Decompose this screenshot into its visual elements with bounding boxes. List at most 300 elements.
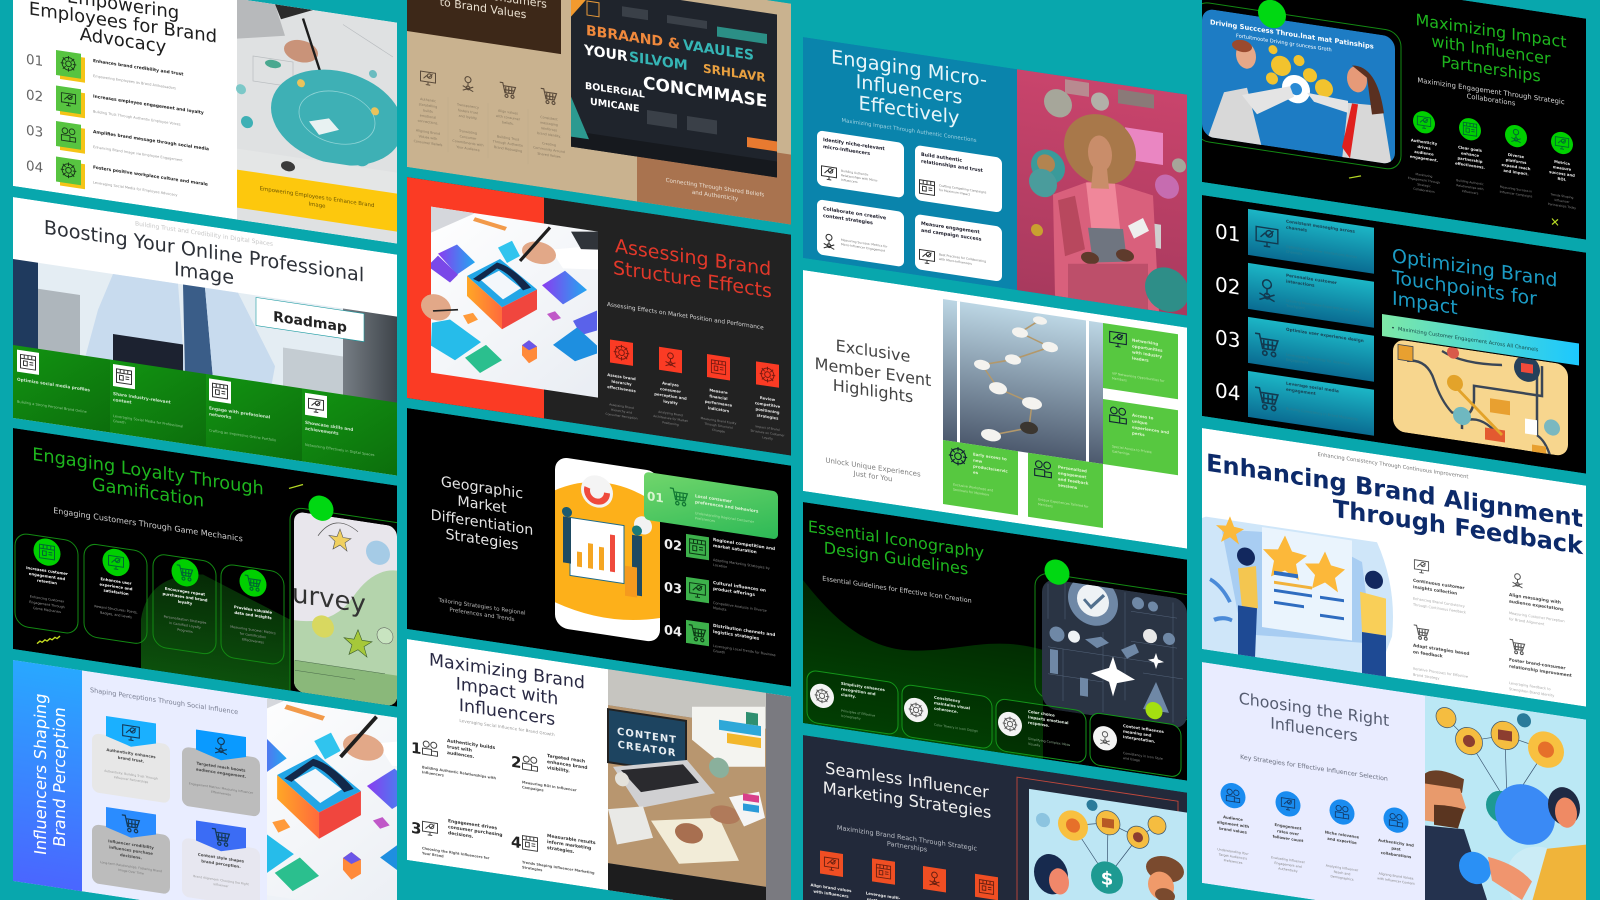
- column 1: [414, 70, 443, 147]
- list item 3: product offerings: [713, 586, 755, 598]
- card 2: Targeted reach boosts: [197, 761, 246, 773]
- item 1: 1: [411, 739, 421, 758]
- row 3: 03: [1215, 325, 1240, 353]
- item 2: [1271, 789, 1306, 875]
- feature D: engagement: [1058, 470, 1086, 480]
- subtitle: Key Strategies for Effective Influencer Selection: [1240, 754, 1388, 783]
- list item 2: Adapting Marketing Strategies by: [713, 558, 770, 570]
- card 1: Engagement Through: [29, 600, 65, 609]
- card 4: Context influences: [1123, 723, 1165, 734]
- item 2: Evaluating Influencer: [1271, 855, 1306, 865]
- card 4: Content style shapes: [198, 852, 245, 864]
- item 4: relationship improvement: [1509, 664, 1572, 679]
- list row 2: 02: [26, 87, 43, 106]
- card 3: Simplifying Complex Ideas: [1028, 737, 1071, 747]
- photo: woman in pink: [1017, 69, 1189, 316]
- subtitle: Maximizing Impact Through Authentic Connections: [842, 118, 977, 144]
- item 4: Trends Shaping Influencer Marketing: [522, 860, 595, 875]
- row 4: Building Consistency in Brand Messaging: [1286, 407, 1358, 421]
- item 1: Assess brand: [607, 372, 636, 381]
- list item 1: Preferences: [695, 516, 715, 523]
- column 4: reinforces: [541, 126, 557, 133]
- card 1: Principles of Effective: [841, 709, 875, 718]
- card 2: Growth: [113, 419, 126, 425]
- item 4: Strengthen Brand Identity: [1509, 687, 1554, 698]
- item 2: Architecture for Market: [653, 414, 689, 423]
- item 3: Through Structural: [703, 421, 733, 430]
- card 1: recognition and: [841, 686, 876, 696]
- list row 1: [26, 50, 184, 90]
- list row 4: [26, 156, 208, 197]
- card 3: Micro-Influencer Engagement: [841, 242, 886, 253]
- feature C: Seminars for Members: [953, 488, 989, 497]
- card 1: brand trust.: [118, 755, 145, 764]
- row 3: Engagement: [1286, 358, 1309, 365]
- title: Optimizing Brand: [1392, 244, 1557, 292]
- card 4: for Gamification: [240, 632, 266, 639]
- item 4: [1548, 130, 1576, 210]
- item 3: expand reach: [1502, 162, 1531, 171]
- card 4: meaning and: [1123, 729, 1152, 738]
- list row 3: 03: [26, 123, 43, 141]
- feature C: products/servic: [973, 464, 1008, 474]
- title: Design Guidelines: [824, 538, 968, 579]
- column 4: Community Around: [533, 145, 565, 154]
- card 3: decisions.: [120, 852, 142, 860]
- feature C: [943, 440, 1018, 515]
- item 4: [1509, 639, 1572, 700]
- item 2: Campaigns: [522, 785, 544, 792]
- column 3: Through Authentic: [492, 139, 523, 148]
- row 4: Leverage social media: [1286, 381, 1339, 394]
- card 4: with Micro-Influencers: [939, 257, 972, 266]
- column 4: messaging: [540, 120, 558, 127]
- card 4: and Usage: [1123, 756, 1140, 763]
- card 3: Measuring Success: Metrics for: [841, 238, 888, 249]
- item 1: Target Audience's: [1218, 852, 1247, 861]
- title: [831, 45, 987, 134]
- list item 1: preferences and behaviors: [695, 499, 759, 514]
- title: Touchpoints for: [1391, 265, 1537, 310]
- brown caption box: and Authenticity: [692, 190, 739, 203]
- item 2: Analyzing Brand: [658, 410, 683, 417]
- card 3: Engage with professional: [209, 405, 271, 421]
- card 3: [206, 374, 302, 461]
- feedback illustration: [1202, 512, 1393, 679]
- list row 4: Leveraging Social Media for Employee Advocacy: [93, 181, 177, 197]
- item 2: [1509, 572, 1565, 629]
- card 4: Best Practices for Collaborating: [939, 252, 986, 263]
- card 3: Image Over Time: [118, 868, 144, 876]
- item 4: Trends Shaping: [1550, 192, 1573, 200]
- list row 4: Fosters positive workplace culture and morale: [93, 165, 208, 188]
- column 4: Consistent: [540, 115, 558, 122]
- card 3: [92, 805, 170, 895]
- column 2: and loyalty.: [459, 114, 477, 121]
- card 3: Color choice: [1028, 709, 1055, 718]
- column 1: builds: [423, 108, 433, 114]
- item 3: Measuring Brand Equity: [701, 416, 737, 425]
- item 2: Align messaging with: [1509, 592, 1561, 606]
- list row 3: Amplifies brand message through social media: [93, 129, 209, 152]
- framed partnership illustration: Fortuitmoote Driving gr suncess Groth: [1236, 33, 1332, 53]
- row 2: 02: [1215, 272, 1240, 300]
- title: Essential Iconography: [808, 517, 985, 562]
- title: Engaging Loyalty Through: [32, 444, 264, 500]
- row 1: channels: [1286, 225, 1308, 233]
- item 3: and impact.: [1503, 168, 1529, 177]
- row 2: interactions: [1286, 279, 1315, 288]
- title: [1415, 10, 1567, 90]
- list item 4: Distribution channels and: [713, 623, 775, 638]
- item 3: 3: [411, 819, 421, 838]
- item 3: Measuring Success in: [1500, 185, 1532, 194]
- card 1: [817, 130, 904, 198]
- list item 3: Competitive Analysis in Diverse: [713, 601, 767, 613]
- subtitle: Building Trust and Credibility in Digital Spaces: [135, 220, 273, 248]
- feature C: es: [973, 470, 979, 475]
- title: Strategies: [445, 527, 519, 554]
- card 1: Influencer Partnerships: [114, 775, 149, 784]
- poster image: SRHLAVR: [703, 61, 766, 85]
- item 3: [701, 353, 737, 435]
- isometric illustration: [267, 698, 397, 900]
- item 3: Adapt strategies based: [1413, 643, 1469, 657]
- feature A: Networking: [1132, 337, 1158, 346]
- subtitle: Essential Guidelines for Effective Icon Creation: [822, 574, 972, 605]
- item 1: trust with: [447, 744, 472, 754]
- item 4: 4: [511, 833, 521, 852]
- subtitle band: Maximizing Customer Engagement Across All Channels: [1398, 326, 1539, 353]
- list row 2: Increases employee engagement and loyalty: [93, 94, 204, 116]
- green wave: [803, 580, 1043, 759]
- row 3: [1215, 312, 1374, 382]
- item 2: Clear goals: [1458, 144, 1483, 153]
- card 3: loyalty: [178, 599, 193, 606]
- card 2: experience and: [100, 582, 133, 591]
- card 3: content strategies: [823, 213, 873, 226]
- subtitle: Maximizing Engagement Through Strategic: [1417, 76, 1565, 106]
- card 2: Engagement Metrics: Measuring Influencer: [189, 781, 254, 795]
- framed icon illustration: [1035, 567, 1205, 732]
- card 1: [92, 714, 170, 804]
- card 2: [84, 543, 147, 645]
- item 1: [1412, 559, 1467, 615]
- list item 2: [664, 530, 775, 576]
- list row 4: 04: [26, 158, 43, 177]
- card 1: retention: [37, 578, 57, 586]
- item 4: strategies: [757, 412, 779, 421]
- item 1: Enhancing Brand Consistency: [1413, 597, 1465, 608]
- item 4: Structure on Customer: [751, 429, 785, 438]
- item 1: effectiveness: [607, 384, 636, 393]
- item 2: 2: [511, 753, 521, 772]
- list item 3: Cultural influences on: [713, 580, 766, 594]
- item 1: Preferences: [1224, 858, 1243, 865]
- column 1: storytelling: [419, 102, 437, 109]
- title: Influencers: [856, 70, 962, 109]
- card 2: coherence.: [934, 706, 959, 714]
- item 1: [606, 339, 638, 421]
- item 3: Reach and: [1334, 870, 1350, 876]
- card 4: Showcase skills and: [305, 420, 353, 433]
- item 4: Influencer: [1555, 198, 1570, 204]
- title: Through Feedback: [1333, 495, 1584, 560]
- item 4: measure: [1553, 164, 1572, 172]
- title: Geographic: [441, 474, 523, 502]
- subtitle: Collaborations: [1467, 92, 1516, 108]
- item 1: alignment with: [1217, 819, 1249, 829]
- item 3: financial: [709, 393, 728, 401]
- item 2: Targeted reach: [547, 753, 585, 765]
- poster image: BOLERGIAL: [585, 81, 645, 101]
- card 1: Building a Strong Personal Brand Online: [17, 400, 87, 414]
- photo: content creator desk: CREATOR: [618, 740, 676, 759]
- card 1: micro-influencers: [823, 144, 870, 157]
- item 3: Influencer Campaigns: [1500, 190, 1533, 199]
- list item 2: Regional competition and: [713, 537, 775, 552]
- item 3: Brand Strategy: [1413, 673, 1439, 681]
- column 3: Brand Messaging: [494, 145, 522, 153]
- item 2: enhances brand: [547, 759, 587, 771]
- card 1: Iconography: [841, 714, 861, 721]
- panel: gamification slide: [13, 428, 410, 725]
- panel: influencers shaping perception slide: [13, 659, 434, 900]
- title: Maximizing Impact: [1415, 10, 1567, 52]
- item 4: competitive: [755, 400, 781, 409]
- item 3: Demographics: [1330, 874, 1354, 882]
- feature C: Exclusive Workshops and: [953, 483, 993, 493]
- card 3: Programs: [177, 628, 193, 634]
- card 2: Crafting Compelling Campaigns: [939, 183, 987, 195]
- card 1: engagement and: [29, 571, 65, 581]
- subtitle: Leveraging Social Influence for Brand Growth: [459, 718, 555, 737]
- card 4: [221, 563, 284, 666]
- brown caption box: [637, 132, 792, 225]
- item 4: [511, 828, 596, 880]
- item 4: Aligning Brand Values: [1379, 872, 1414, 881]
- title: Choosing the Right: [1239, 689, 1389, 730]
- column 1: Authentic: [420, 97, 436, 103]
- item 3: [411, 813, 502, 867]
- column 2: Transparency: [456, 102, 479, 110]
- row 2: Creating Memorable Experiences at Every: [1286, 299, 1359, 314]
- item 2: Engagement and: [1274, 861, 1302, 869]
- list row 2: Building Trust Through Authentic Employee Voices: [93, 110, 181, 127]
- item 4: Strategies: [522, 865, 542, 872]
- item 4: [751, 361, 785, 443]
- title: Gamification: [92, 474, 204, 512]
- title: [815, 333, 931, 409]
- feature D: Personalized: [1058, 464, 1087, 474]
- feature A: opportunities: [1132, 343, 1163, 353]
- card 2: Badges, and Levels: [100, 611, 132, 619]
- title: Impact: [1392, 287, 1458, 319]
- card 4: [1090, 712, 1181, 778]
- framed partnership illustration: Driving Succcess Throu.lnat mat Patinships: [1210, 18, 1374, 51]
- yellow squiggle: [36, 636, 60, 644]
- item 4: positioning: [755, 406, 780, 415]
- subtitle: Shaping Perceptions Through Social Influence: [90, 686, 238, 716]
- row 2: [1215, 258, 1374, 328]
- card 2: for Maximum Impact: [939, 188, 971, 197]
- card 3: Collaborate on creative: [823, 206, 887, 222]
- card 1: Authenticity: Building Trust Through: [104, 769, 158, 781]
- item 4: [1377, 805, 1415, 886]
- card 2: Build authentic: [921, 152, 962, 164]
- item 4: Loyalty: [762, 435, 773, 441]
- item 3: [1500, 123, 1533, 199]
- row 1: [1215, 204, 1374, 274]
- item 1: Authenticity: [1411, 137, 1438, 146]
- card 2: [110, 360, 206, 447]
- card 2: Color Theory in Icon Design: [934, 723, 978, 733]
- title: Seamless Influencer: [825, 758, 989, 802]
- column 2: [452, 76, 484, 152]
- card 3: purchases and brand: [162, 591, 208, 603]
- column 1: Consumer Beliefs: [414, 139, 443, 147]
- brown caption box: Connecting Through Shared Beliefs: [666, 178, 764, 199]
- item 4: Partnerships Today: [1548, 202, 1576, 210]
- card 4: brand perception.: [201, 858, 241, 869]
- item 1: Building Authentic Relationships with: [422, 765, 497, 780]
- subtitle: [437, 598, 526, 625]
- item 4: Leveraging Feedback to: [1509, 681, 1551, 691]
- item 1: [811, 849, 852, 899]
- list item 1: Understanding Regional Consumer: [695, 511, 755, 524]
- item 1: Consumer Perception: [606, 412, 638, 421]
- item 2: Influencers: [1462, 189, 1479, 195]
- item 1: Influencers: [422, 770, 444, 778]
- item 3: [1325, 797, 1359, 883]
- journey map illustration: [1393, 336, 1568, 465]
- item 1: Understanding Your: [1217, 847, 1249, 856]
- vertical title band: Influencers Shaping: [31, 692, 50, 856]
- item 1: with influencers: [813, 889, 849, 899]
- column 3: Building Trust: [497, 134, 520, 142]
- card 2: relationships and trust: [921, 159, 984, 174]
- photo: content creator desk: CONTENT: [617, 727, 677, 746]
- card 2: satisfaction: [103, 588, 129, 596]
- callout band: Empowering Employees to Enhance Brand: [260, 186, 374, 209]
- feature B: experiences and: [1132, 424, 1169, 435]
- item 2: [1455, 116, 1485, 197]
- row 1: Optimizing Customer Interactions Across: [1286, 245, 1357, 259]
- list item 4: 04: [664, 623, 682, 641]
- poster image: BBRAAND &: [586, 23, 680, 53]
- item 2: partnership: [1457, 155, 1483, 164]
- title: Member Event: [815, 354, 931, 390]
- row 1: 01: [1215, 219, 1240, 247]
- feature D: Unique Experiences Tailored for: [1038, 497, 1089, 509]
- list item 2: market saturation: [713, 543, 757, 555]
- item 3: on feedback: [1413, 649, 1443, 660]
- card 1: [807, 670, 898, 735]
- item 1: Collaborations: [1413, 187, 1435, 194]
- card 4: Influencer: [214, 882, 229, 888]
- item 2: for Brand Alignment: [1509, 617, 1545, 626]
- item 1: brand values: [1219, 826, 1248, 835]
- photo: winding path: [943, 299, 1103, 464]
- roadmap label: [256, 297, 364, 342]
- feature A: Members: [1112, 376, 1127, 383]
- title: Image: [174, 257, 234, 289]
- list item 4: logistics strategies: [713, 629, 760, 642]
- vertical title band: [13, 660, 82, 891]
- card 1: Game Mechanics: [33, 606, 61, 614]
- row 4: 04: [1215, 378, 1240, 406]
- item 4: ROI.: [1558, 176, 1567, 182]
- column 4: Shared Values: [537, 152, 561, 159]
- item 3: and expertise: [1327, 836, 1357, 845]
- card 4: Networking Effectively in Digital Spaces: [305, 443, 375, 457]
- title: Enhancing Brand Alignment: [1206, 449, 1583, 533]
- poster image: SILVOM: [629, 49, 688, 74]
- list item 1: 01: [647, 489, 664, 505]
- item 1: Engagement Through: [1408, 176, 1440, 185]
- list row 1: Enhances brand credibility and trust: [93, 58, 183, 78]
- card 2: Share industry-relevant: [113, 391, 171, 406]
- card 1: Increases customer: [26, 565, 68, 576]
- card 4: [182, 818, 260, 900]
- list item 4: Growth: [713, 649, 725, 655]
- list item 1: Local consumer: [695, 493, 733, 504]
- feature B: perks: [1132, 430, 1145, 437]
- list item 1: [644, 472, 778, 540]
- card 4: interpretation.: [1123, 734, 1156, 744]
- item 2: perception and: [654, 391, 687, 401]
- feature B: unique: [1132, 418, 1148, 426]
- card 3: Long-term Relationships: Fostering Brand: [100, 860, 162, 873]
- card 2: Effectiveness: [211, 790, 231, 797]
- card 3: [153, 553, 216, 655]
- yellow dash: [288, 484, 304, 489]
- column 4: Creating: [542, 141, 556, 147]
- title: Engaging Micro-: [831, 45, 987, 92]
- title: Influencers: [459, 696, 555, 730]
- green dot: [308, 496, 334, 521]
- yellow dash: [1349, 174, 1361, 180]
- list row 3: Enhancing Brand Image via Employee Engagement: [93, 145, 183, 163]
- card 3: Encourages repeat: [165, 586, 205, 597]
- card 4: and campaign success: [921, 228, 982, 243]
- title: Differentiation: [431, 508, 533, 539]
- item 3: Choosing the Right Influencers for: [422, 846, 490, 860]
- item 3: platforms: [1506, 157, 1527, 165]
- title: [431, 473, 533, 556]
- network illustration: [1017, 777, 1187, 900]
- card 2: maintains visual: [934, 700, 971, 711]
- title: Assessing Brand: [615, 234, 771, 281]
- item 2: Engagement: [1275, 822, 1302, 831]
- card 4: data and insights: [234, 610, 272, 620]
- panel: influencer partnerships slide: [1194, 0, 1586, 240]
- card 1: Influencers: [841, 178, 858, 184]
- item 3: Analyzing Influencer: [1326, 864, 1359, 873]
- item 3: consumer purchasing: [448, 824, 502, 838]
- column 4: [528, 86, 565, 170]
- subtitle: Unlock Unique Experiences: [825, 455, 921, 479]
- card 3: [996, 698, 1086, 763]
- framed partnership illustration: [1194, 1, 1401, 171]
- row 1: Consistent messaging across: [1286, 219, 1355, 234]
- column 2: Your Audience: [456, 145, 480, 152]
- title: [823, 758, 991, 822]
- item 3: [923, 866, 946, 900]
- row 3: Optimize user experience design: [1286, 327, 1364, 343]
- subtitle: Engaging Customers Through Game Mechanics: [53, 506, 243, 543]
- roadmap label: Roadmap: [273, 309, 347, 336]
